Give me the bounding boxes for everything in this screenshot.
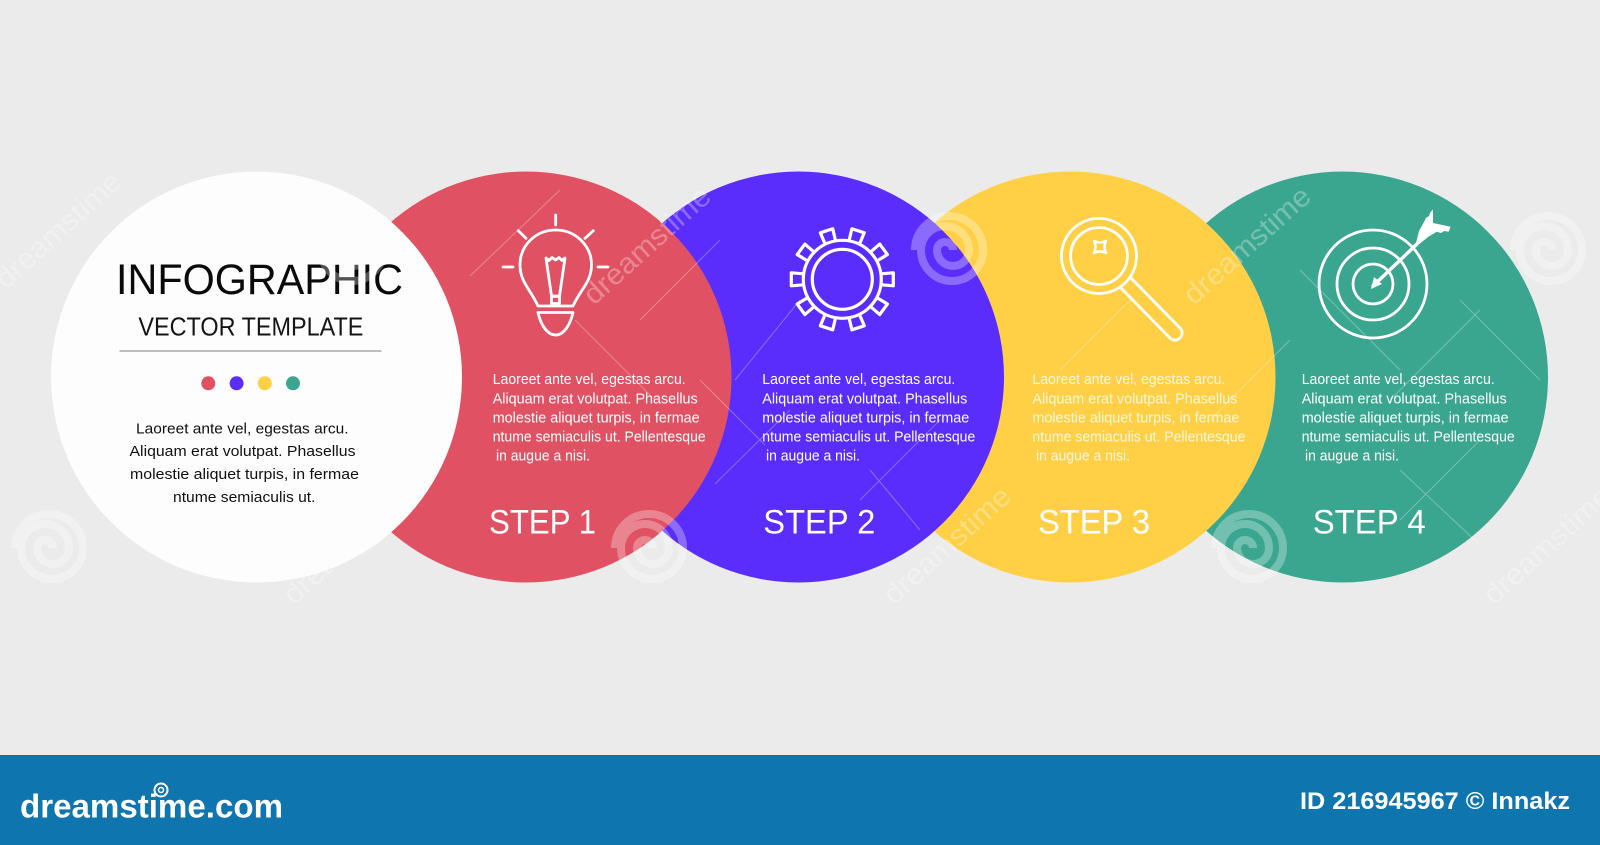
intro text: Laoreet ante vel, egestas arcu. (136, 420, 348, 437)
intro text: ntume semiaculis ut. (173, 489, 316, 506)
yellow circle (864, 172, 1276, 582)
text: dreamstime (877, 480, 1018, 611)
intro text (130, 420, 359, 506)
footer bar (0, 755, 1600, 845)
panel: step 4 (1137, 172, 1548, 582)
step 4 description (1302, 372, 1515, 464)
step 3 description: Aliquam erat volutpat. Phasellus (1032, 391, 1237, 407)
step 4 description: in augue a nisi. (1305, 448, 1399, 464)
panel: step 1 (320, 172, 732, 582)
step 2 description: in augue a nisi. (766, 448, 860, 464)
step 1 description (493, 372, 706, 464)
step 3 label: STEP 3 (1038, 503, 1150, 541)
footer logo: dreamstime.com (20, 788, 283, 824)
text: dreamstime (1177, 180, 1318, 311)
title: INFOGRAPHIC (116, 256, 403, 304)
step 2 description (762, 372, 975, 464)
step 3 description: in augue a nisi. (1036, 448, 1130, 464)
panel: step 3 (864, 172, 1276, 582)
icon: target with arrow (1319, 209, 1450, 338)
step 4 label: STEP 4 (1313, 503, 1426, 541)
step 1 description: Laoreet ante vel, egestas arcu. (493, 372, 686, 388)
intro text: molestie aliquet turpis, in fermae (130, 466, 359, 483)
text: dreamstime (577, 180, 718, 311)
step 3 description: ntume semiaculis ut. Pellentesque (1032, 429, 1245, 445)
intro text: Aliquam erat volutpat. Phasellus (130, 443, 356, 460)
step 4 description: Laoreet ante vel, egestas arcu. (1302, 372, 1495, 388)
step 3 description: Laoreet ante vel, egestas arcu. (1032, 372, 1225, 388)
icon: gear (791, 229, 893, 330)
subtitle: VECTOR TEMPLATE (138, 311, 363, 341)
step 4 description: Aliquam erat volutpat. Phasellus (1302, 391, 1507, 407)
legend dots (201, 376, 300, 390)
step 4 description: ntume semiaculis ut. Pellentesque (1302, 429, 1515, 445)
green circle (1137, 172, 1548, 582)
text: dreamstime (277, 480, 418, 611)
step 1 description: molestie aliquet turpis, in fermae (493, 410, 700, 426)
step 2 description: Laoreet ante vel, egestas arcu. (762, 372, 955, 388)
blue circle (593, 172, 1004, 582)
step 2 label: STEP 2 (763, 503, 875, 541)
image id and credit: ID 216945967 © Innakz (1300, 788, 1570, 815)
step 1 description: Aliquam erat volutpat. Phasellus (493, 391, 698, 407)
step 2 description: Aliquam erat volutpat. Phasellus (762, 391, 967, 407)
step 1 description: in augue a nisi. (496, 448, 590, 464)
step 2 description: molestie aliquet turpis, in fermae (762, 410, 969, 426)
red circle (320, 172, 732, 582)
step 1 label: STEP 1 (489, 503, 596, 541)
step 2 description: ntume semiaculis ut. Pellentesque (762, 429, 975, 445)
icon: light bulb (503, 215, 608, 335)
step 3 description (1032, 372, 1245, 464)
icon: magnifier (1062, 218, 1182, 340)
panel: step 2 (593, 172, 1004, 582)
white circle (51, 172, 462, 582)
step 3 description: molestie aliquet turpis, in fermae (1032, 410, 1239, 426)
step 1 description: ntume semiaculis ut. Pellentesque (493, 429, 706, 445)
panel: title circle (51, 172, 462, 582)
step 4 description: molestie aliquet turpis, in fermae (1302, 410, 1509, 426)
